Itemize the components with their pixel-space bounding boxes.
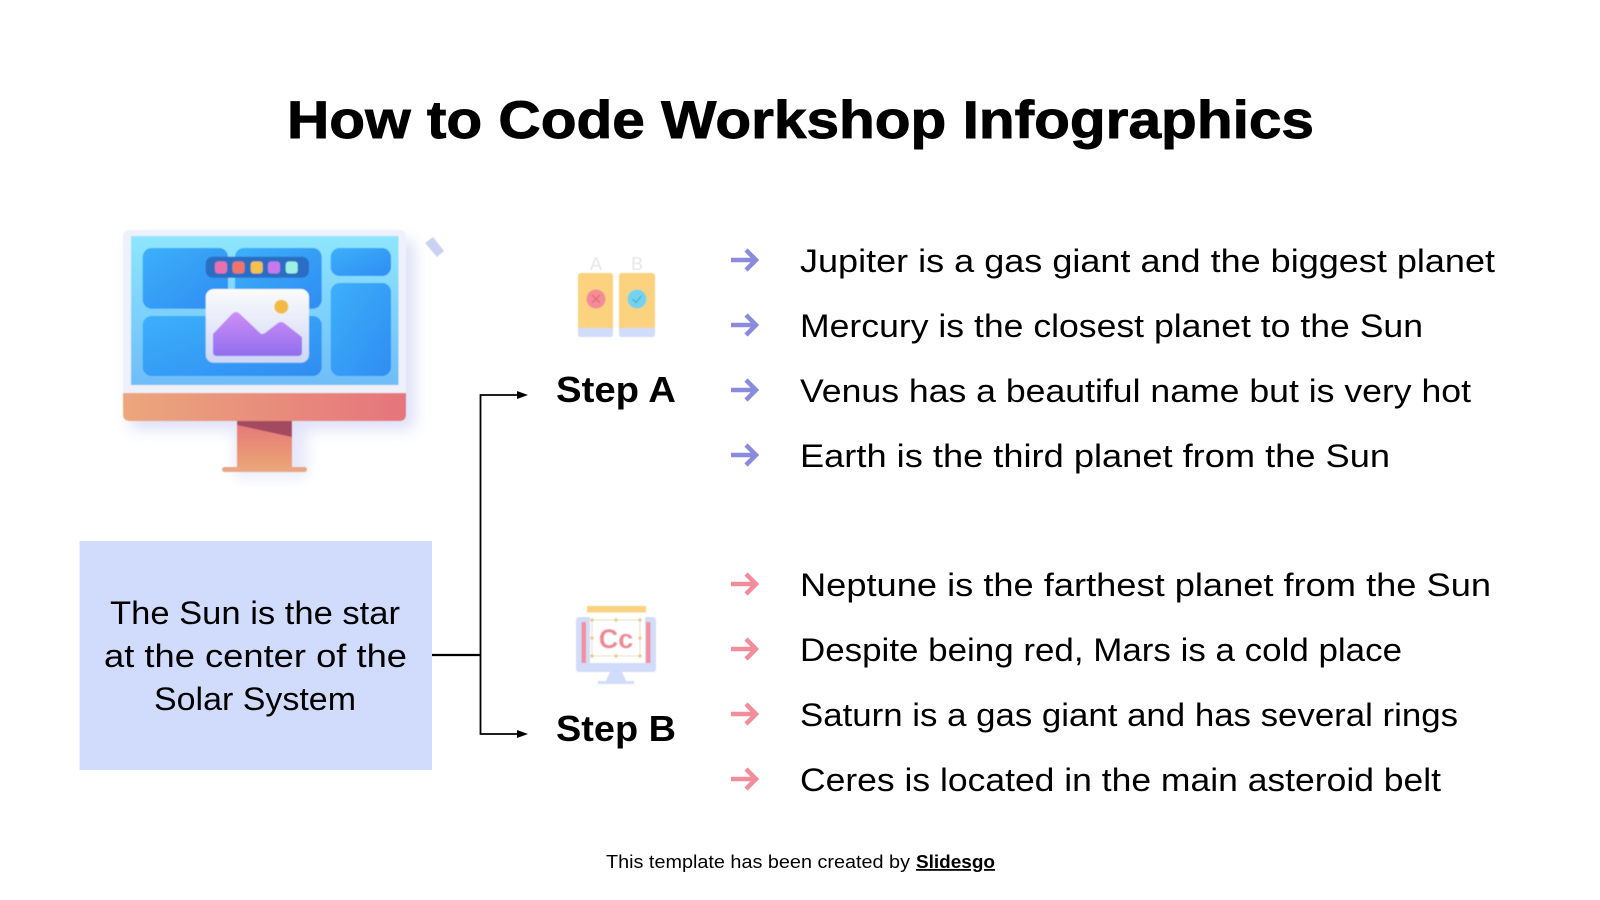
text: Earth: Earth is the third planet from the Sun — [800, 438, 1390, 474]
arrow: bullet 1 — [731, 250, 756, 270]
title: How to Code Workshop Infographics — [287, 91, 1314, 150]
arrow: bullet 8 — [731, 769, 756, 789]
text: Jupiter: Jupiter is a gas giant and the biggest planet — [800, 243, 1495, 279]
footer credit: Slidesgo — [916, 852, 995, 872]
icon: desktop monitor illustration — [123, 230, 444, 477]
text: Mercury: Mercury is the closest planet to the Sun — [800, 308, 1423, 344]
icon: A/B phones — [578, 254, 655, 337]
icon: Cc typography monitor — [576, 606, 656, 684]
heading: Step B: Step B — [556, 708, 676, 749]
list: Step B points — [731, 567, 1491, 798]
panel: sun description — [80, 541, 432, 770]
text: Neptune: Neptune is the farthest planet from the Sun — [800, 567, 1491, 603]
arrow: branching connector to steps — [432, 391, 528, 738]
arrow: bullet 3 — [731, 380, 756, 400]
arrow: bullet 6 — [731, 639, 756, 659]
arrow: bullet 5 — [731, 574, 756, 594]
arrow: bullet 4 — [731, 445, 756, 465]
icon: Cc typography monitor: Cc — [599, 624, 633, 654]
text: Mars: Despite being red, Mars is a cold place — [800, 632, 1402, 668]
panel: sun description: at the center of the — [104, 638, 407, 674]
arrow: bullet 2 — [731, 315, 756, 335]
text: Ceres: Ceres is located in the main asteroid belt — [800, 762, 1441, 798]
text: Venus: Venus has a beautiful name but is very hot — [800, 373, 1471, 409]
icon: A/B phones: A — [590, 254, 602, 274]
icon: A/B phones: B — [631, 254, 643, 274]
footer credit: This template has been created by — [606, 852, 910, 872]
panel: sun description: Solar System — [154, 681, 356, 717]
panel: sun description: The Sun is the star — [110, 595, 400, 631]
list: Step A points — [731, 243, 1495, 474]
text: Saturn: Saturn is a gas giant and has several rings — [800, 697, 1458, 733]
arrow: bullet 7 — [731, 704, 756, 724]
heading: Step A: Step A — [556, 369, 676, 410]
